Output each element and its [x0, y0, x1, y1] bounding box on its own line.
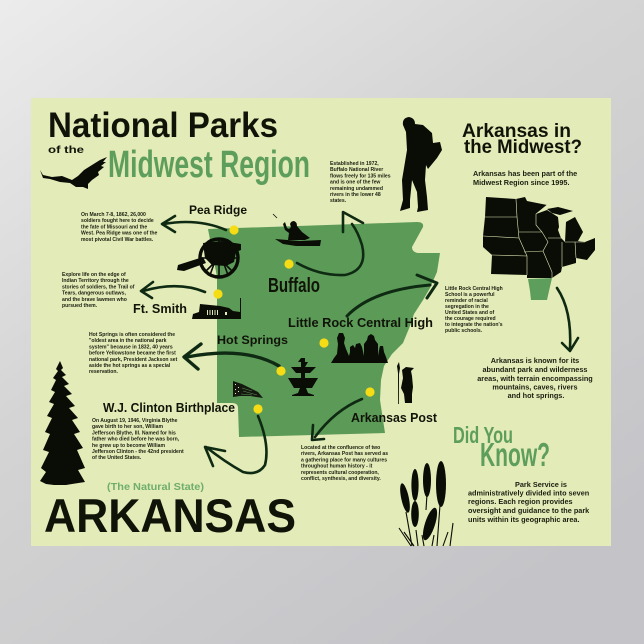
arrow: Arkansas Post	[312, 399, 362, 440]
arrow: Midwest	[557, 288, 578, 351]
map: Arkansas state	[208, 222, 440, 437]
icon: hiker	[400, 117, 442, 212]
title: Midwest Region	[108, 144, 310, 186]
text: Buffalo description: Buffalo National River	[330, 167, 383, 173]
text: Pea Ridge description: On March 7-8, 1862, 26,000	[81, 212, 146, 218]
dot: Little Rock	[319, 338, 329, 348]
text: Little Rock description: segregation in the	[445, 304, 489, 310]
text: The Natural State: (The Natural State)	[107, 482, 204, 493]
text: Clinton description: he grew up to become William	[92, 443, 165, 449]
heading: Arkansas in the Midwest: the Midwest?	[464, 137, 582, 158]
label: Pea Ridge: Pea Ridge	[189, 203, 247, 217]
text: Clinton description: Jefferson Clinton - the 42nd president	[92, 449, 184, 455]
icon: American flag	[233, 381, 263, 398]
dot: Clinton	[253, 404, 263, 414]
heading: Did You Know	[453, 422, 550, 473]
text: Hot Springs description: before Yellowstone became the first	[89, 351, 176, 357]
text: Pea Ridge description: West. Pea Ridge was one of the	[81, 231, 157, 237]
text: Little Rock description: United States and of	[445, 310, 495, 316]
dot: Arkansas Post	[365, 387, 375, 397]
text: Hot Springs description: "oldest area in the national park	[89, 338, 167, 344]
text: Midwest membership: Arkansas has been part of the	[473, 169, 577, 178]
label: W.J. Clinton Birthplace: W.J. Clinton Birthplace	[103, 401, 235, 415]
arrow: Ft. Smith	[141, 282, 205, 298]
text: Ft. Smith description: Tears, dangerous outlaws,	[62, 291, 126, 297]
text: Arkansas Post description: Located at the confluence of two	[301, 445, 380, 451]
arrow: Little Rock	[347, 275, 437, 316]
icon: Little Rock students	[331, 333, 388, 363]
text: Did You Know body: oversight and guidance to the park	[468, 506, 590, 515]
text: Pea Ridge description: the fate of Missouri and the	[81, 224, 147, 230]
icon: pampas grass	[398, 461, 453, 546]
text: Arkansas Post description: throughout human history - it	[301, 464, 373, 470]
text: Clinton description: On August 19, 1946, Virginia Blythe	[92, 418, 178, 424]
title: National Parks	[48, 106, 278, 145]
text: Ft. Smith description: Indian Territory through the	[62, 278, 129, 284]
text: Arkansas parks summary: mountains, caves, rivers	[492, 382, 578, 392]
dot: Hot Springs	[276, 366, 286, 376]
icon: pine tree	[40, 361, 85, 485]
text: Ft. Smith description: stories of soldiers, the Trail of	[62, 284, 135, 290]
text: Did You Know body: regions. Each region provides	[468, 497, 573, 506]
text: Did You Know body: administratively divided into seven	[468, 488, 589, 498]
heading: Did You Know: Did You	[453, 422, 513, 448]
arrow: Pea Ridge	[162, 216, 226, 232]
dot: Pea Ridge	[229, 225, 239, 235]
icon: fort building	[192, 298, 241, 319]
text: Midwest membership: Midwest Region since 1995.	[473, 178, 570, 187]
text: Buffalo description: remaining undammed	[330, 186, 383, 192]
text: Clinton description: gave birth to her son, William	[92, 424, 163, 430]
text: Did You Know body: Park Service is	[515, 480, 567, 489]
icon: cannon	[177, 239, 241, 277]
icon: eagle	[40, 157, 107, 189]
map: Midwest states	[483, 197, 595, 278]
text: Arkansas Post description: a gathering place for many cultures	[301, 457, 387, 463]
text: Clinton description: of the United States.	[92, 455, 142, 461]
text: Arkansas parks summary: Arkansas is known for its	[491, 356, 579, 365]
text: Arkansas Post description: conflict, synthesis, and diversity.	[301, 476, 381, 482]
icon: fountain	[288, 358, 318, 396]
label: Ft. Smith: Ft. Smith	[133, 301, 187, 316]
text: Little Rock description: reminder of racial	[445, 298, 488, 304]
text: Arkansas Post description: represents cultural cooperation,	[301, 470, 379, 476]
label: Hot Springs: Hot Springs	[217, 333, 288, 347]
text: Pea Ridge description: soldiers fought here to decide	[81, 218, 154, 224]
text: Little Rock description: School is a powerful	[445, 292, 495, 298]
text: Hot Springs description: system" because in 1832, 40 years	[89, 344, 173, 350]
text: Buffalo description: rivers in the lower 48	[330, 192, 381, 198]
text: Little Rock description: public schools.	[445, 328, 483, 334]
arrow: Hot Springs	[184, 344, 279, 369]
icon: soldier with halberd	[397, 362, 414, 404]
map: Arkansas highlight	[528, 278, 552, 300]
text: Ft. Smith description: and the brave lawmen who	[62, 297, 127, 303]
dot: Buffalo	[284, 259, 294, 269]
text: Little Rock description: to integrate the nation's	[445, 322, 503, 328]
text: Clinton description: father who died before he was born,	[92, 437, 180, 443]
heading: Arkansas in the Midwest: Arkansas in	[462, 121, 571, 142]
text: Buffalo description: and is one of the few	[330, 180, 380, 186]
text: Clinton description: Jefferson Blythe, III. Named for his	[92, 430, 176, 436]
text: Did You Know body: units within its geographic area.	[468, 515, 580, 524]
text: Arkansas Post description: rivers, Arkansas Post has served as	[301, 451, 388, 457]
text: Buffalo description: flows freely for 135 miles	[330, 173, 391, 179]
label: Little Rock Central High: Little Rock Central High	[288, 316, 433, 330]
title	[48, 106, 310, 186]
text: Little Rock description: Little Rock Central High	[445, 286, 503, 292]
text: Hot Springs description: Hot Springs is often considered the	[89, 332, 175, 338]
text: Hot Springs description: aside the hot springs as a special	[89, 363, 171, 369]
heading: Did You Know: Know?	[480, 436, 550, 473]
text: Hot Springs description: national park, President Jackson set	[89, 357, 178, 363]
text: Buffalo description: Established in 1972,	[330, 161, 379, 167]
text: Little Rock description: the courage required	[445, 316, 496, 322]
text: Arkansas parks summary: and hot springs.	[508, 391, 564, 400]
text: Ft. Smith description: Explore life on the edge of	[62, 272, 126, 278]
text: Pea Ridge description: most pivotal Civil War battles.	[81, 237, 154, 243]
text: Buffalo description: states.	[330, 198, 347, 204]
arrow: Buffalo	[297, 212, 363, 275]
text: Ft. Smith description: pursued them.	[62, 303, 98, 309]
arrow: Clinton	[205, 416, 266, 473]
text: Hot Springs description: reservation.	[89, 369, 118, 375]
title: of the	[48, 145, 85, 156]
icon: kayaker	[273, 214, 321, 246]
text: Arkansas parks summary: abundant park and wilderness	[482, 365, 588, 374]
dot: Ft. Smith	[213, 289, 223, 299]
label: Arkansas Post: Arkansas Post	[351, 411, 438, 425]
panel: poster background	[31, 98, 611, 546]
heading: Arkansas in the Midwest	[462, 121, 582, 158]
heading: ARKANSAS: ARKANSAS	[44, 489, 296, 542]
label: Buffalo: Buffalo	[268, 275, 320, 297]
text: Arkansas parks summary: areas, with terrain encompassing	[477, 374, 593, 383]
